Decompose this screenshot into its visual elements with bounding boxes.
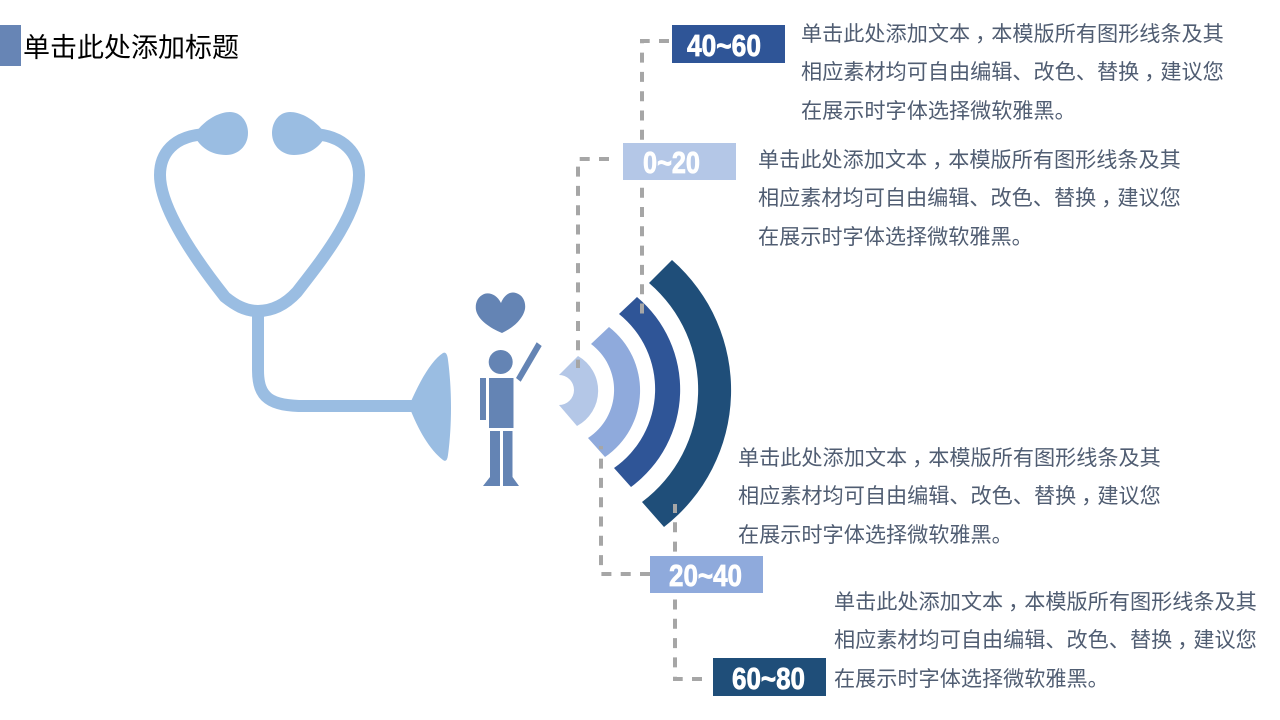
text block: 0~20: 相应素材均可自由编辑、改色、替换，建议您: [758, 186, 1181, 210]
title: 单击此处添加标题: [23, 33, 239, 63]
label: 60~80: 60~80: [732, 661, 805, 696]
label: 20~40: 20~40: [669, 558, 742, 593]
connector: 60~80: [675, 504, 702, 679]
icon: person with heart: [476, 292, 542, 486]
text block: 0~20: 在展示时字体选择微软雅黑。: [758, 225, 1033, 249]
text block: 60~80: [834, 590, 1257, 691]
text block: 20~40: 在展示时字体选择微软雅黑。: [738, 523, 1013, 547]
text block: 40~60: 相应素材均可自由编辑、改色、替换，建议您: [801, 60, 1224, 84]
label: 40~60: 40~60: [687, 28, 761, 63]
text block: 60~80: 在展示时字体选择微软雅黑。: [834, 667, 1109, 691]
label: 0~20: [623, 143, 736, 180]
text block: 20~40: 单击此处添加文本，本模版所有图形线条及其: [738, 446, 1161, 470]
text block: 40~60: 单击此处添加文本，本模版所有图形线条及其: [801, 22, 1224, 46]
text block: 0~20: [758, 148, 1181, 249]
text block: 20~40: [738, 446, 1161, 547]
icon: stethoscope: [160, 112, 451, 461]
connector: 40~60: [642, 41, 669, 316]
text block: 60~80: 单击此处添加文本，本模版所有图形线条及其: [834, 590, 1257, 614]
title accent block: [0, 25, 21, 66]
text block: 20~40: 相应素材均可自由编辑、改色、替换，建议您: [738, 484, 1161, 508]
connector: 20~40: [601, 446, 650, 574]
connector: 0~20: [578, 159, 609, 368]
text block: 40~60: 在展示时字体选择微软雅黑。: [801, 99, 1076, 123]
text block: 0~20: 单击此处添加文本，本模版所有图形线条及其: [758, 148, 1181, 172]
label: 0~20: 0~20: [643, 145, 700, 180]
text block: 40~60: [801, 22, 1224, 123]
signal arcs chart: [559, 260, 731, 527]
text block: 60~80: 相应素材均可自由编辑、改色、替换，建议您: [834, 628, 1257, 652]
